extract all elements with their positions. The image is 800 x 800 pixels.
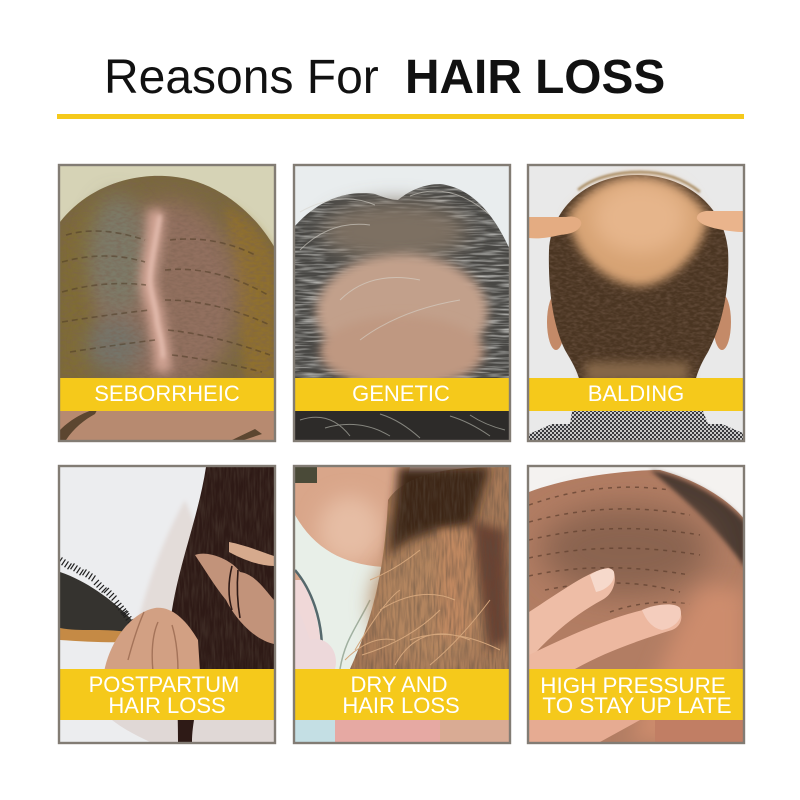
label band xyxy=(295,669,509,720)
panel: seborrheic xyxy=(59,165,276,442)
label band xyxy=(60,669,274,720)
label: HAIR LOSS xyxy=(108,693,226,718)
frame xyxy=(59,165,275,441)
photo: back of balding head xyxy=(529,166,745,442)
label: POSTPARTUM xyxy=(89,672,239,697)
panel: high pressure xyxy=(528,466,745,743)
panel: balding xyxy=(528,165,745,442)
label: GENETIC xyxy=(352,381,450,406)
label: TO STAY UP LATE xyxy=(542,693,732,718)
title: Reasons For xyxy=(104,51,379,104)
label: SEBORRHEIC xyxy=(94,381,240,406)
photo: thinning scalp with fingers xyxy=(529,467,745,742)
frame xyxy=(59,466,275,743)
label: HIGH PRESSURE xyxy=(540,673,726,698)
frame xyxy=(528,165,744,441)
frame xyxy=(528,466,744,743)
label band xyxy=(60,378,274,411)
photo: thinning parting xyxy=(60,166,276,442)
frame xyxy=(294,466,510,743)
frame xyxy=(294,165,510,441)
panel: postpartum hair loss xyxy=(59,466,275,743)
panel: genetic xyxy=(294,165,511,442)
label band xyxy=(529,378,743,411)
label band xyxy=(295,378,509,411)
photo: frizzy hair xyxy=(295,467,509,742)
label: HAIR LOSS xyxy=(342,693,460,718)
label band xyxy=(529,669,743,720)
panel: dry hair loss xyxy=(294,466,510,743)
icon: left finger xyxy=(529,217,581,238)
title emphasis: HAIR LOSS xyxy=(405,51,665,104)
photo: brush and hair xyxy=(60,467,274,742)
icon: right finger xyxy=(697,211,743,232)
photo: bald crown xyxy=(295,166,511,442)
label: DRY AND xyxy=(350,672,448,697)
label: BALDING xyxy=(588,381,684,406)
